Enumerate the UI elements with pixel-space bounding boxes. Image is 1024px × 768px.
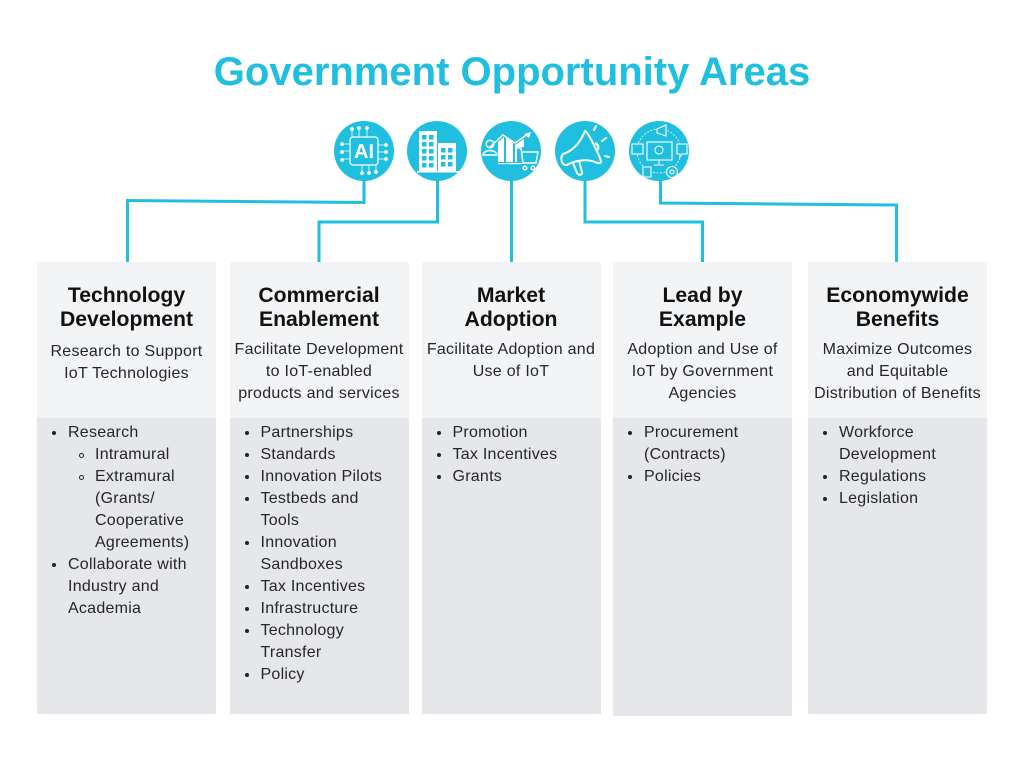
heading: Lead by [662, 284, 743, 307]
bullet list [808, 418, 987, 714]
bullet list: Innovation [260, 534, 337, 551]
description [50, 343, 203, 382]
bullet list: Transfer [260, 644, 321, 661]
bullet list: Promotion [452, 424, 528, 441]
heading: Market [477, 284, 545, 307]
bullet list: Regulations [839, 468, 926, 485]
bullet list: Research [68, 424, 138, 441]
bullet list: Standards [260, 446, 336, 463]
icon: AI chip [334, 121, 394, 181]
heading: Benefits [856, 308, 939, 331]
icon: megaphone [555, 121, 615, 181]
icon: buildings [407, 121, 467, 181]
heading [826, 284, 969, 331]
description: IoT Technologies [64, 365, 189, 382]
description: Facilitate Adoption and [427, 341, 595, 358]
description: Agencies [668, 385, 737, 402]
description: Maximize Outcomes [823, 341, 972, 358]
bullet list: Innovation Pilots [260, 468, 382, 485]
bullet list [422, 418, 600, 714]
bullet list: Extramural [95, 468, 175, 485]
heading [258, 284, 380, 331]
bullet list: (Grants/ [95, 490, 155, 507]
heading: Adoption [465, 308, 557, 331]
description [814, 341, 981, 402]
bullet list: Policy [260, 666, 305, 683]
title: Government Opportunity Areas [214, 50, 810, 94]
heading: Economywide [826, 284, 969, 307]
description: to IoT-enabled [266, 363, 372, 380]
description: Use of IoT [473, 363, 549, 380]
heading: Technology [68, 284, 185, 307]
bullet list: Academia [68, 600, 141, 617]
icon: market chart and cart [481, 121, 541, 181]
bullet list: Agreements) [95, 534, 189, 551]
panel header [808, 262, 987, 418]
bullet list: Development [839, 446, 936, 463]
bullet list: Collaborate with [68, 556, 187, 573]
panel: technology development [37, 262, 216, 714]
heading: Commercial [258, 284, 380, 307]
description: IoT by Government [632, 363, 773, 380]
panel: economywide benefits [808, 262, 987, 714]
bullet list: Intramural [95, 446, 170, 463]
bullet list [37, 418, 216, 714]
panel header [613, 262, 792, 418]
heading [60, 284, 193, 331]
bullet list: Industry and [68, 578, 159, 595]
panel header [37, 262, 216, 418]
description [235, 341, 404, 402]
icon: digital marketing [629, 121, 689, 181]
bullet list: Sandboxes [260, 556, 343, 573]
heading: Example [659, 308, 746, 331]
panel: commercial enablement [230, 262, 409, 714]
panel: lead by example [613, 262, 792, 716]
description: Research to Support [50, 343, 203, 360]
description: Distribution of Benefits [814, 385, 981, 402]
bullet list: Testbeds and [260, 490, 359, 507]
description [627, 341, 778, 402]
bullet list: Workforce [839, 424, 914, 441]
panel header [422, 262, 600, 418]
heading [465, 284, 557, 331]
heading [659, 284, 746, 331]
heading: Enablement [259, 308, 379, 331]
bullet list: Grants [452, 468, 502, 485]
panel: market adoption [422, 262, 601, 714]
bullet list: Cooperative [95, 512, 184, 529]
bullet list: (Contracts) [644, 446, 726, 463]
description: products and services [238, 385, 400, 402]
bullet list: Technology [260, 622, 344, 639]
description: and Equitable [847, 363, 948, 380]
bullet list: Legislation [839, 490, 918, 507]
bullet list: Partnerships [260, 424, 353, 441]
bullet list [613, 418, 792, 716]
heading: Development [60, 308, 193, 331]
icon: AI chip: AI [354, 141, 374, 163]
bullet list: Tools [260, 512, 299, 529]
bullet list: Policies [644, 468, 701, 485]
bullet list: Procurement [644, 424, 738, 441]
description: Adoption and Use of [627, 341, 778, 358]
bullet list: Tax Incentives [260, 578, 365, 595]
description: Facilitate Development [235, 341, 403, 358]
bullet list: Tax Incentives [452, 446, 557, 463]
description [427, 341, 595, 380]
bullet list [230, 418, 408, 714]
panel header [230, 262, 408, 418]
bullet list: Infrastructure [260, 600, 358, 617]
